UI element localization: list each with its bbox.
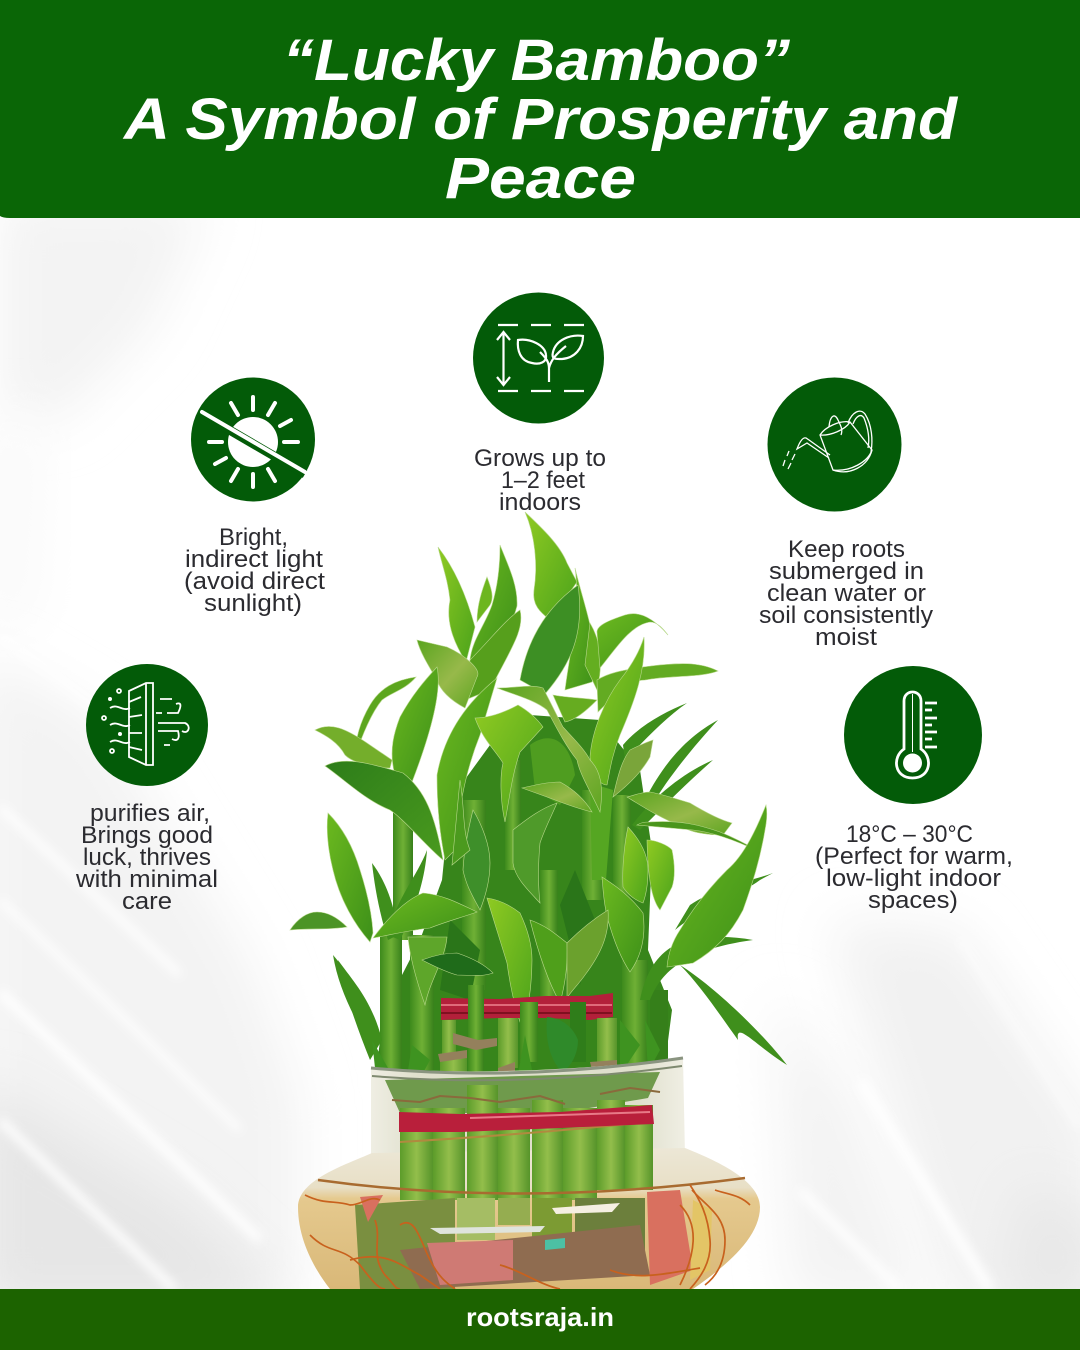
label: height: indoors — [499, 489, 581, 516]
label: benefits — [75, 800, 218, 915]
leaf bases under rim — [385, 1072, 660, 1113]
brown stalk caps — [438, 1033, 617, 1075]
plant and vase illustration — [290, 512, 787, 1289]
upper leaves — [290, 512, 767, 1030]
title: Peace — [445, 146, 636, 211]
label: light: indirect light — [185, 546, 323, 573]
label: water: moist — [815, 624, 877, 651]
glass vase — [298, 1058, 760, 1289]
label: light: Bright, — [219, 524, 288, 551]
title: A Symbol of Prosperity and — [122, 87, 959, 152]
icon: height of plant — [473, 292, 604, 424]
header banner — [0, 0, 1080, 218]
glass shoulder and water — [298, 1148, 760, 1289]
label: benefits: purifies air, — [90, 800, 210, 827]
rim and water lines — [318, 1058, 745, 1194]
label: benefits: care — [122, 888, 172, 915]
label: height: 1–2 feet — [501, 467, 585, 494]
icon: thermometer — [844, 666, 982, 804]
icon: watering can — [768, 378, 902, 512]
orange roots — [305, 1185, 750, 1289]
label: light: sunlight) — [204, 590, 302, 617]
label: benefits: luck, thrives — [83, 844, 211, 871]
lower red ribbon — [399, 1105, 654, 1132]
label: light: (avoid direct — [184, 568, 325, 595]
dark foliage mass behind leaves — [376, 715, 672, 1072]
stalks inside neck and water — [400, 1085, 653, 1220]
label: water: Keep roots — [788, 536, 905, 563]
footer bar — [0, 1289, 1080, 1350]
label: temperature: 18°C – 30°C — [846, 821, 973, 848]
label: water: clean water or — [767, 580, 926, 607]
back stalks — [380, 738, 668, 1070]
icon: indirect light — [191, 378, 315, 502]
upper red ribbon — [441, 993, 613, 1020]
upper glass neck — [371, 1058, 685, 1158]
label: temperature: low-light indoor — [826, 865, 1001, 892]
label: temperature: spaces) — [868, 887, 958, 914]
label: temperature: (Perfect for warm, — [815, 843, 1013, 870]
label: height — [474, 445, 606, 516]
footer bar: rootsraja.in — [466, 1302, 614, 1332]
lower small leaves at rim — [372, 1017, 660, 1075]
title — [122, 28, 959, 211]
label: benefits: Brings good — [81, 822, 213, 849]
label: height: Grows up to — [474, 445, 606, 472]
stalks in front of ribbon — [440, 985, 617, 1080]
label: benefits: with minimal — [75, 866, 218, 893]
submerged stalk shadows — [355, 1190, 712, 1289]
label: temperature — [815, 821, 1013, 914]
label: light — [184, 524, 325, 617]
label: water: submerged in — [769, 558, 924, 585]
icon: air purifier — [86, 664, 208, 786]
node detail at stalks — [392, 1088, 660, 1104]
label: water: soil consistently — [759, 602, 934, 629]
back leaves — [333, 703, 787, 1065]
title: “Lucky Bamboo” — [283, 28, 790, 93]
label: water — [759, 536, 934, 651]
